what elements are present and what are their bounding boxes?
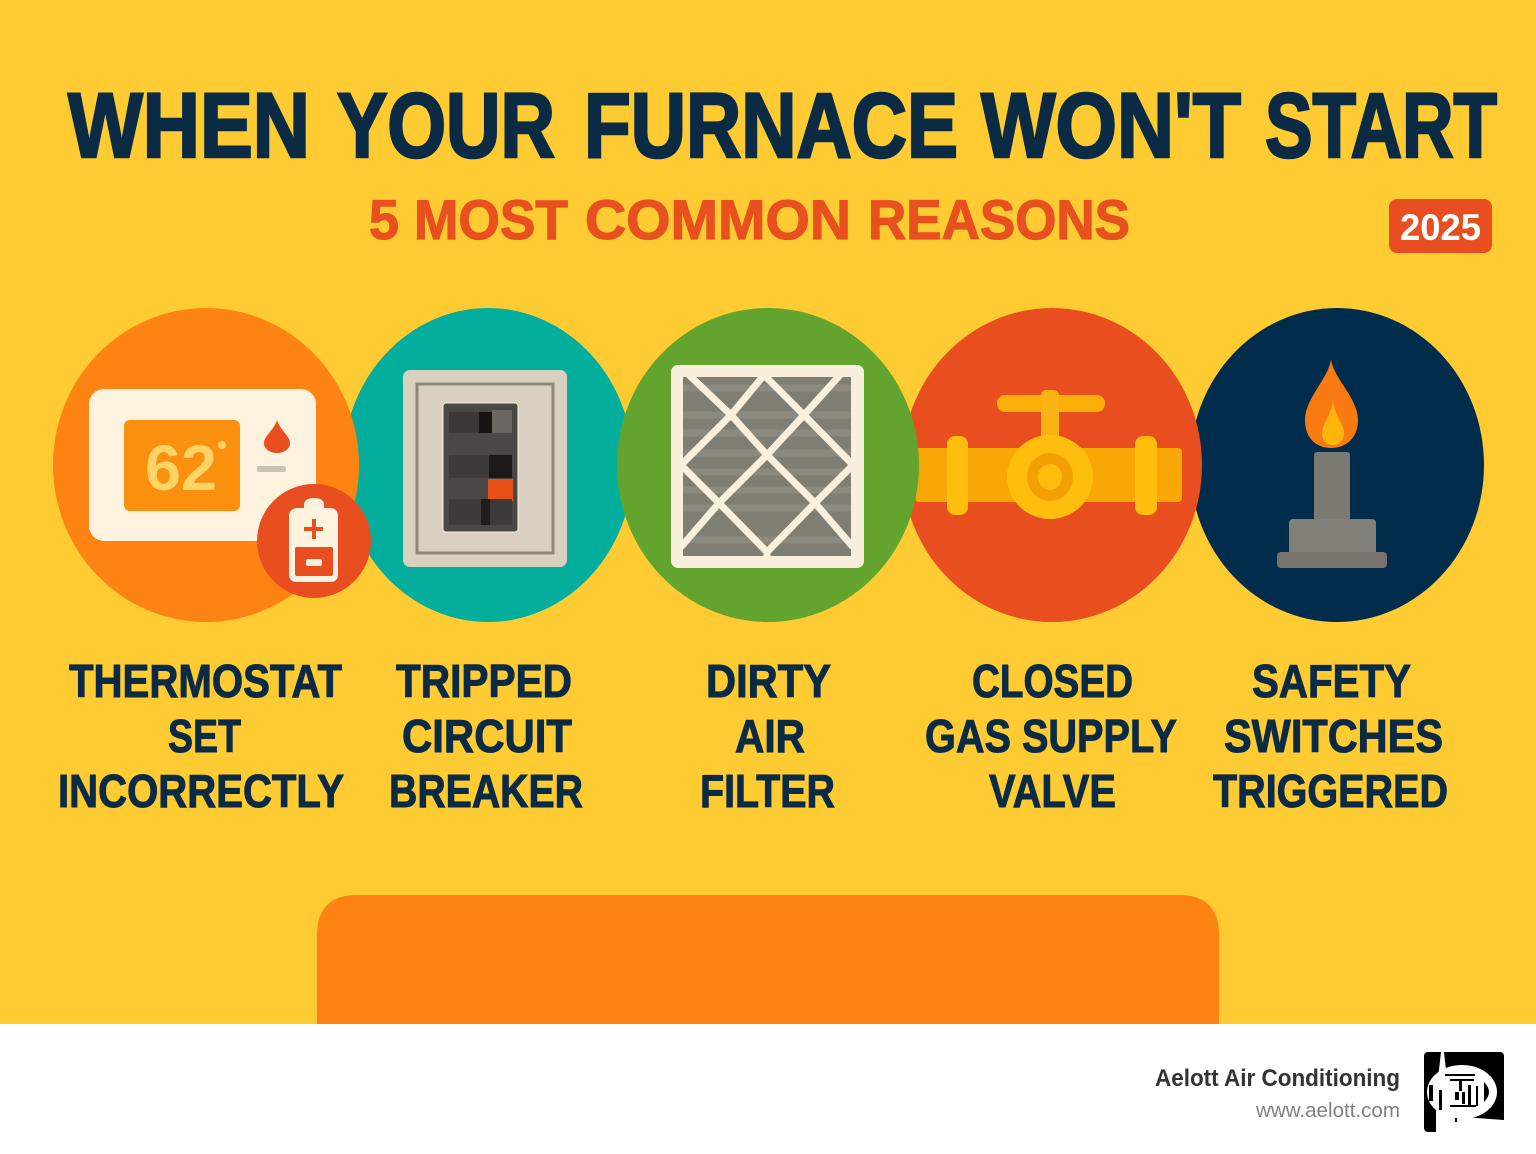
label: safety switches triggered: SAFETY bbox=[1252, 655, 1411, 707]
breaker wall plate bbox=[403, 370, 567, 567]
battery badge bbox=[257, 484, 371, 598]
subtitle: REASONS bbox=[868, 188, 1130, 251]
label: thermostat set incorrectly: INCORRECTLY bbox=[58, 765, 344, 817]
panel: closed gas supply valve icon bbox=[902, 308, 1202, 622]
title: WON'T bbox=[981, 75, 1241, 177]
subtitle: 5 bbox=[369, 188, 399, 251]
air filter bbox=[671, 365, 864, 568]
title: WHEN bbox=[68, 75, 310, 177]
year badge: 2025 bbox=[1400, 207, 1481, 248]
flame bbox=[1305, 359, 1358, 448]
indicator dash bbox=[257, 466, 286, 472]
year badge bbox=[1389, 199, 1492, 253]
label: dirty air filter bbox=[700, 655, 835, 817]
label: tripped circuit breaker bbox=[389, 655, 583, 817]
label: thermostat set incorrectly: THERMOSTAT bbox=[69, 655, 342, 707]
label: dirty air filter: FILTER bbox=[700, 765, 835, 817]
panel: safety switches icon bbox=[1190, 308, 1484, 622]
burner stand bbox=[1277, 452, 1387, 568]
label: closed gas supply valve: CLOSED bbox=[972, 655, 1133, 707]
panel: tripped circuit breaker icon bbox=[343, 308, 633, 622]
icon: company logo bbox=[1424, 1052, 1504, 1132]
label: dirty air filter: DIRTY bbox=[706, 655, 831, 707]
subtitle bbox=[369, 188, 1130, 251]
subtitle: COMMON bbox=[585, 188, 851, 251]
bottom orange panel bbox=[317, 895, 1219, 1024]
panel: thermostat set incorrectly icon bbox=[53, 308, 371, 622]
label: safety switches triggered bbox=[1213, 655, 1448, 817]
label: safety switches triggered: SWITCHES bbox=[1224, 710, 1443, 762]
icon: water drop bbox=[264, 420, 290, 453]
degree mark bbox=[218, 441, 226, 449]
label: thermostat set incorrectly: SET bbox=[168, 710, 241, 762]
label: tripped circuit breaker: TRIPPED bbox=[396, 655, 572, 707]
footer website: www.aelott.com bbox=[1255, 1100, 1400, 1122]
label: closed gas supply valve bbox=[925, 655, 1177, 817]
label: safety switches triggered: TRIGGERED bbox=[1213, 765, 1448, 817]
label: thermostat set incorrectly bbox=[58, 655, 344, 817]
label: dirty air filter: AIR bbox=[735, 710, 805, 762]
label: closed gas supply valve: GAS SUPPLY bbox=[925, 710, 1177, 762]
gas valve bbox=[915, 390, 1182, 519]
thermostat body bbox=[89, 389, 316, 541]
label: tripped circuit breaker: CIRCUIT bbox=[402, 710, 572, 762]
title bbox=[68, 75, 1497, 177]
footer brand name: Aelott Air Conditioning bbox=[1155, 1065, 1400, 1092]
temperature reading: 62 bbox=[145, 432, 217, 504]
label: tripped circuit breaker: BREAKER bbox=[389, 765, 583, 817]
panel: dirty air filter icon bbox=[617, 308, 919, 622]
title: YOUR bbox=[337, 75, 555, 177]
subtitle: MOST bbox=[414, 188, 568, 251]
title: FURNACE bbox=[584, 75, 958, 177]
label: closed gas supply valve: VALVE bbox=[989, 765, 1116, 817]
thermostat screen bbox=[124, 420, 240, 511]
